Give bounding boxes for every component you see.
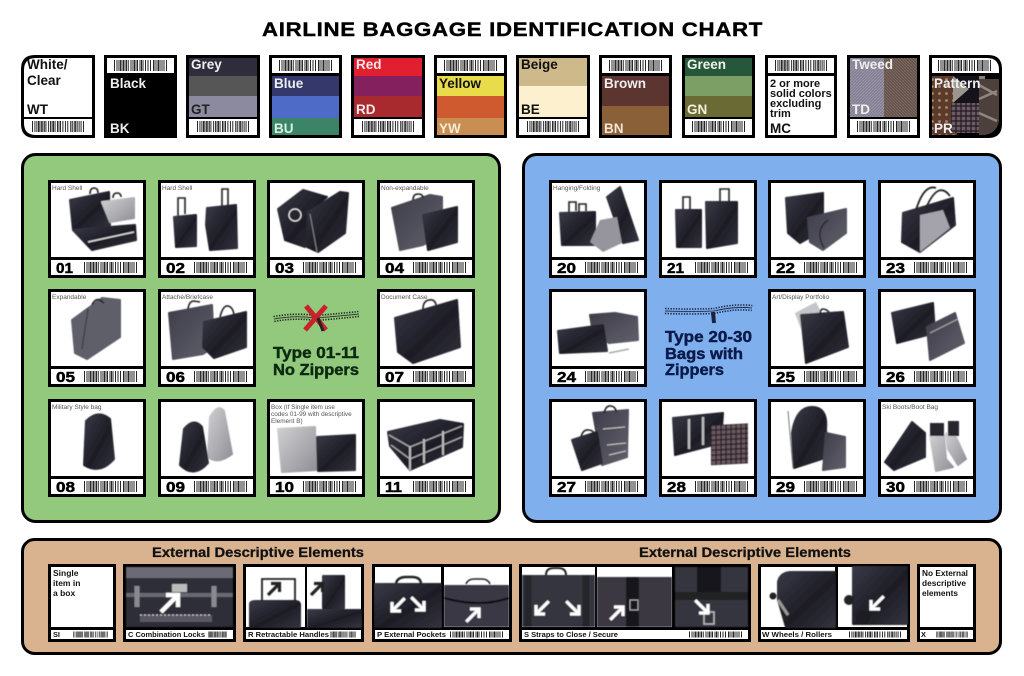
card 29: 29 bbox=[776, 479, 795, 496]
card 24 bbox=[549, 289, 647, 387]
card 08: Military Style bag bbox=[52, 404, 102, 411]
panel: zippered bags bbox=[524, 154, 1000, 522]
card 24: 24 bbox=[557, 369, 577, 386]
element: none: descriptive bbox=[922, 578, 966, 588]
swatch: green: GN bbox=[687, 102, 707, 117]
card 07: Document Case bbox=[381, 294, 428, 301]
element: single item: a box bbox=[53, 588, 75, 598]
card 25: Art/Display Portfolio bbox=[772, 294, 829, 301]
card 01 bbox=[48, 180, 146, 278]
text: type 01-11 no zippers: Type 01-11 bbox=[273, 345, 359, 362]
swatch: yellow bbox=[434, 55, 507, 138]
text: type 20-30 bags with zippers bbox=[665, 329, 752, 379]
swatch: white: Clear bbox=[27, 73, 62, 88]
card 06: Attaché/Briefcase bbox=[162, 294, 213, 301]
swatch: white: White/ bbox=[27, 57, 68, 72]
swatch: blue: BU bbox=[274, 121, 294, 136]
swatch: red bbox=[351, 55, 425, 138]
swatch: red: Red bbox=[356, 57, 382, 72]
element: none: X bbox=[921, 630, 926, 639]
swatch: brown: BN bbox=[604, 121, 624, 136]
card 25 bbox=[768, 289, 866, 387]
swatch: multi color: excluding bbox=[770, 98, 821, 110]
element: retractable handles bbox=[243, 564, 364, 642]
element: none bbox=[917, 564, 976, 642]
swatch: white: WT bbox=[27, 102, 49, 117]
swatch: multi color: trim bbox=[770, 108, 791, 120]
card 22 bbox=[768, 180, 866, 278]
icon: zipper bbox=[665, 307, 752, 323]
element: straps bbox=[519, 564, 751, 642]
card 07: 07 bbox=[385, 369, 404, 386]
card 23: 23 bbox=[886, 260, 905, 277]
card 01: Hard Shell bbox=[52, 185, 83, 192]
element: none: No External bbox=[922, 568, 968, 578]
element: straps: S Straps to Close / Secure bbox=[524, 630, 618, 639]
card 26 bbox=[878, 289, 976, 387]
card 09: 09 bbox=[166, 479, 185, 496]
card 30 bbox=[878, 399, 976, 497]
card 02: 02 bbox=[166, 260, 185, 277]
card 28 bbox=[659, 399, 757, 497]
card 22: 22 bbox=[776, 260, 795, 277]
card 30: 30 bbox=[886, 479, 905, 496]
card 11 bbox=[377, 399, 475, 497]
element: single item: Single bbox=[53, 568, 79, 578]
element: wheels bbox=[758, 564, 910, 642]
card 05 bbox=[48, 289, 146, 387]
card 28: 28 bbox=[667, 479, 686, 496]
card 20: Hanging/Folding bbox=[553, 185, 601, 192]
card 06 bbox=[158, 289, 256, 387]
element: external pockets: P External Pockets bbox=[377, 630, 446, 639]
card 10: Element B) bbox=[271, 418, 303, 425]
card 08 bbox=[48, 399, 146, 497]
swatch: pattern: PR bbox=[934, 121, 953, 136]
swatch: pattern bbox=[929, 55, 1002, 138]
card 10: codes 01-99 with descriptive bbox=[271, 411, 352, 418]
swatch: green bbox=[682, 55, 755, 138]
element: none: elements bbox=[922, 588, 958, 598]
card 26: 26 bbox=[886, 369, 905, 386]
element: wheels: W Wheels / Rollers bbox=[762, 630, 832, 639]
swatch: tweed: Tweed bbox=[852, 57, 893, 72]
card 03: 03 bbox=[275, 260, 294, 277]
card 10 bbox=[267, 399, 365, 497]
swatch: grey: Grey bbox=[191, 57, 222, 72]
swatch: brown: Brown bbox=[604, 76, 646, 91]
card 05: 05 bbox=[56, 369, 75, 386]
card 04: Non-expandable bbox=[381, 185, 429, 192]
text: type 01-11 no zippers: No Zippers bbox=[273, 362, 359, 379]
element: combination locks: C Combination Locks bbox=[128, 630, 205, 639]
card 30: Ski Boots/Boot Bag bbox=[882, 404, 938, 411]
card 25: 25 bbox=[776, 369, 795, 386]
card 05: Expandable bbox=[52, 294, 87, 301]
swatch: tweed bbox=[847, 55, 920, 138]
swatch: red: RD bbox=[356, 102, 376, 117]
swatch: black: BK bbox=[110, 121, 130, 136]
card 01: 01 bbox=[56, 260, 73, 277]
swatch: multi color: solid colors bbox=[770, 88, 832, 100]
card 21: 21 bbox=[667, 260, 684, 277]
text: type 20-30 bags with zippers: Type 20-30 bbox=[665, 329, 752, 346]
swatch: brown bbox=[599, 55, 672, 138]
element: single item bbox=[48, 564, 116, 642]
card 11: 11 bbox=[385, 479, 402, 496]
text: type 20-30 bags with zippers: Bags with bbox=[665, 346, 743, 363]
swatch: grey: GT bbox=[191, 102, 211, 117]
card 27 bbox=[549, 399, 647, 497]
swatch: grey bbox=[186, 55, 260, 138]
text: type 20-30 bags with zippers: Zippers bbox=[665, 362, 724, 379]
swatch: yellow: YW bbox=[439, 121, 461, 136]
icon: crossed-out zipper bbox=[274, 306, 359, 331]
element: single item: item in bbox=[53, 578, 80, 588]
card 10: Box (If Single item use bbox=[271, 404, 335, 411]
card 08: 08 bbox=[56, 479, 75, 496]
swatch: blue bbox=[269, 55, 342, 138]
panel: external descriptive elements bbox=[22, 540, 1000, 654]
swatch: white bbox=[21, 55, 95, 138]
swatch: blue: Blue bbox=[274, 76, 304, 91]
swatch: multi color bbox=[765, 55, 837, 138]
element: retractable handles: R Retractable Handles bbox=[248, 630, 329, 639]
card 06: 06 bbox=[166, 369, 185, 386]
swatch: beige: Beige bbox=[521, 57, 558, 72]
card 07 bbox=[377, 289, 475, 387]
text: type 01-11 no zippers bbox=[273, 345, 359, 379]
card 20 bbox=[549, 180, 647, 278]
swatch: black bbox=[104, 55, 177, 138]
card 10: 10 bbox=[275, 479, 294, 496]
swatch: tweed: TD bbox=[852, 102, 870, 117]
swatch: beige bbox=[516, 55, 590, 138]
card 04 bbox=[377, 180, 475, 278]
card 29 bbox=[768, 399, 866, 497]
card 20: 20 bbox=[557, 260, 576, 277]
swatch: black: Black bbox=[110, 76, 147, 91]
heading left: External Descriptive Elements bbox=[152, 545, 364, 560]
element: combination locks bbox=[123, 564, 236, 642]
swatch: multi color: MC bbox=[770, 121, 791, 136]
card 21 bbox=[659, 180, 757, 278]
swatch: yellow: Yellow bbox=[439, 76, 482, 91]
swatch: pattern: Pattern bbox=[934, 76, 981, 91]
swatch: green: Green bbox=[687, 57, 726, 72]
element: external pockets bbox=[372, 564, 512, 642]
card 23 bbox=[878, 180, 976, 278]
swatch: beige: BE bbox=[521, 102, 540, 117]
element: single item: SI bbox=[53, 630, 60, 639]
card 04: 04 bbox=[385, 260, 405, 277]
title: AIRLINE BAGGAGE IDENTIFICATION CHART bbox=[262, 19, 763, 41]
color code swatches bbox=[21, 55, 1002, 138]
card 02: Hard Shell bbox=[162, 185, 193, 192]
swatch: multi color: 2 or more bbox=[770, 78, 820, 90]
card 27: 27 bbox=[557, 479, 576, 496]
card 02 bbox=[158, 180, 256, 278]
panel: no-zipper bags bbox=[22, 154, 500, 522]
card 03 bbox=[267, 180, 365, 278]
heading right: External Descriptive Elements bbox=[639, 545, 851, 560]
card 09 bbox=[158, 399, 256, 497]
